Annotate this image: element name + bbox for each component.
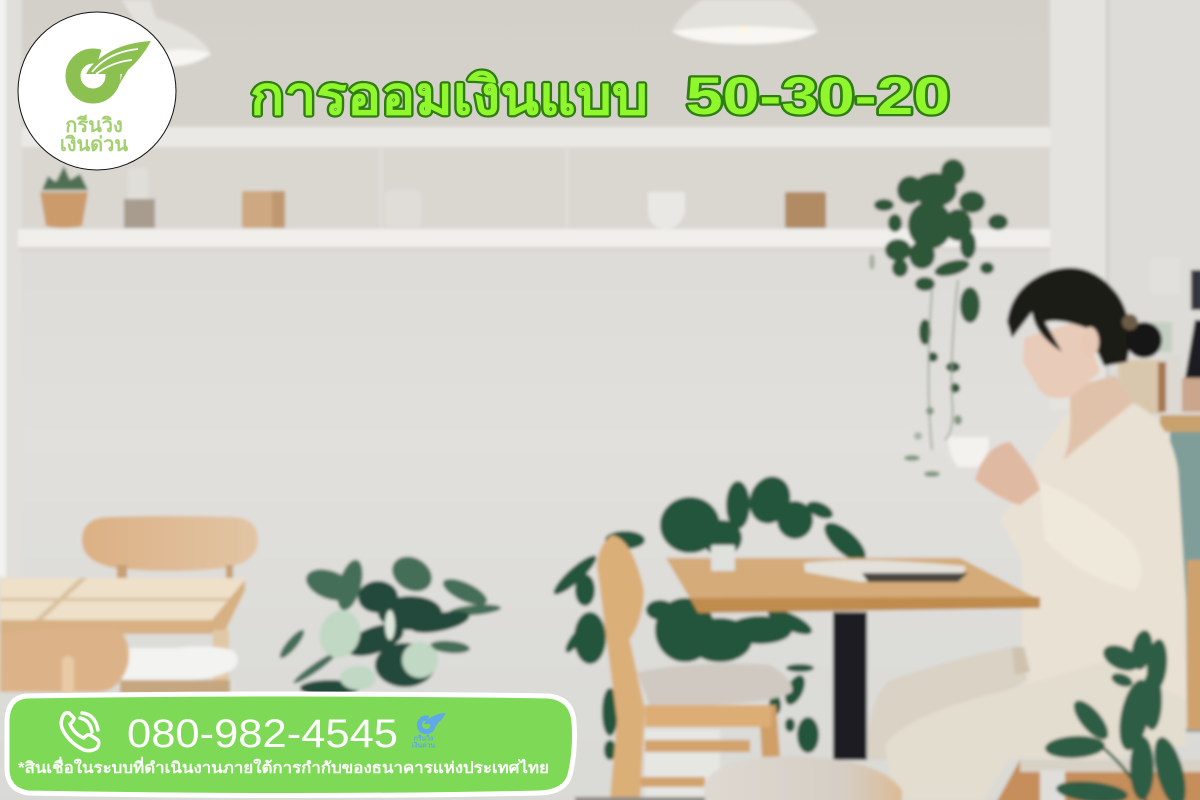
shelf items [40,192,88,228]
title [250,67,950,126]
icon: green wing G [73,41,151,96]
logo wordmark: กรีนวิง [65,114,123,137]
hanging plant [874,159,1008,393]
lamps [122,0,211,66]
left plant [277,550,501,686]
icon: small blue logo: เงินด่วน [412,741,435,749]
contact banner [7,694,574,796]
icon: small blue logo: กรีนวิง [414,734,433,742]
woman: legs [868,647,1028,760]
right background objects [1160,415,1200,432]
logo wordmark: เงินด่วน [60,134,128,156]
centre chair [645,740,750,752]
logo wordmark [60,114,128,156]
logo badge [18,12,176,170]
monstera plant [550,471,872,760]
left table and chairs [82,516,258,571]
title: การออมเงินแบบ [250,67,648,126]
phone number: 080-982-4545 [127,712,398,756]
woman: torso and head [1000,403,1187,728]
main table [666,558,1040,612]
seated chair [995,760,1200,800]
icon: phone [61,713,99,751]
icon: small blue logo [412,713,446,749]
disclaimer: *สินเชื่อในระบบที่ดำเนินงานภายใต้การกำกับของธนาคารแห่งประเทศไทย [18,756,549,777]
title: 50-30-20 [686,67,950,126]
foreground plant [1044,629,1192,800]
stool [704,756,902,800]
